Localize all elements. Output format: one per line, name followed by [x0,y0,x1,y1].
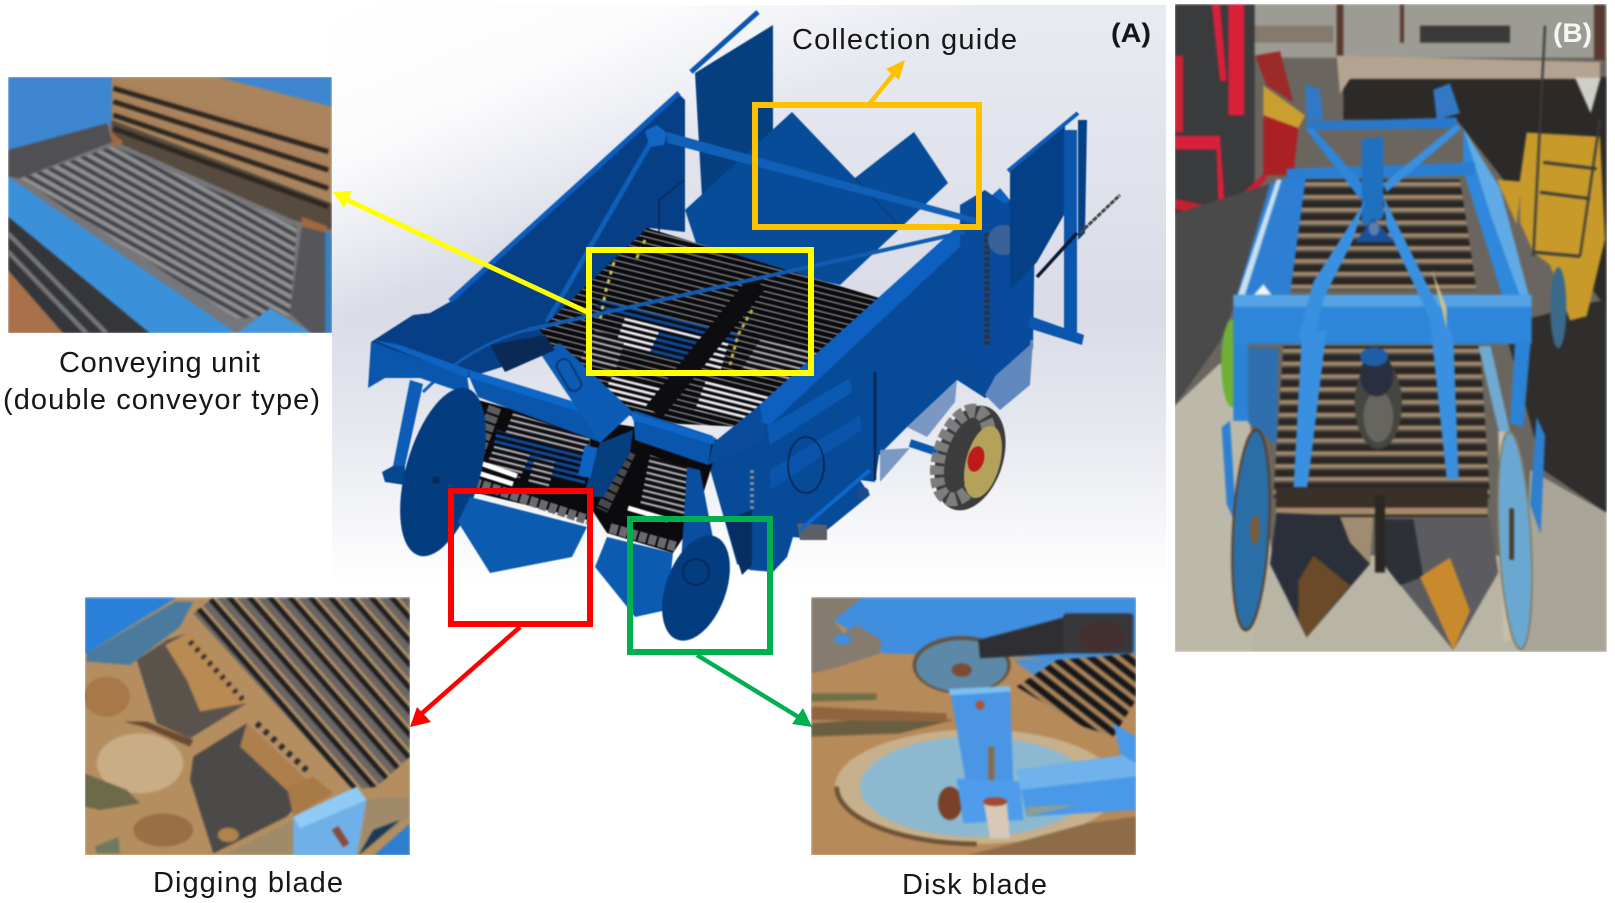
hitch plate [490,335,633,497]
label: Conveying unit (double conveyor type): (double conveyor type) [3,384,320,416]
left disk coulter [382,378,503,566]
label: Conveying unit (double conveyor type) [3,347,320,416]
CAD model of the harvester [368,12,1120,650]
crossbar and legs [1233,295,1532,444]
arrow: to digging blade photo [410,627,520,727]
callout frame: digging blade (red) [451,491,590,624]
label: Collection guide: Collection guide [792,24,1017,56]
green part [1220,318,1235,408]
lower left conveyor [465,400,590,520]
upper conveyor belt [540,228,886,428]
photo: digging blade [83,597,410,856]
label: Disk blade: Disk blade [902,869,1047,901]
arrow: to disk blade photo [697,655,812,727]
collection guide panels [685,112,948,285]
photo: disk blade [811,597,1136,856]
arrow: to conveying unit photo [333,191,587,312]
photo B: real harvester [1175,4,1607,652]
lower right conveyor [590,420,720,553]
left side wall [371,92,685,378]
tie rods [423,132,976,392]
digging blades [1270,496,1498,650]
digging teeth row [1276,487,1488,517]
front crossbeam [368,340,765,465]
label: panel B: (B) [1553,18,1592,48]
photo: conveying unit [8,77,332,333]
label: panel A: (A) [1111,18,1151,48]
digging blades [458,497,673,617]
rear upright with plate and post [1008,113,1120,345]
conveyor rods [1273,179,1490,498]
disks and brackets [1222,417,1545,651]
rear upright plate [691,12,773,215]
top frame [1287,83,1475,199]
panel A: CAD model background [332,5,1166,685]
right disk coulter [649,467,752,650]
arrow: to collection guide label [870,60,905,103]
centre tower and hub [1355,137,1394,242]
PTO shaft cone [1355,347,1402,449]
background: ground [1175,184,1607,652]
side walls [1233,128,1532,309]
transport wheel [910,396,1018,520]
label: Digging blade: Digging blade [153,867,343,899]
label: Conveying unit (double conveyor type): Conveying unit [59,347,260,379]
right side body of the frame [706,188,1035,572]
background: workshop [1175,4,1607,308]
callout frame: collection guide (orange) [755,105,979,227]
wheelbarrow [1497,26,1605,348]
callout frame: conveying unit (yellow) [589,250,811,373]
callout frame: disk blade (green) [630,519,770,652]
A-frame legs [1293,197,1510,491]
